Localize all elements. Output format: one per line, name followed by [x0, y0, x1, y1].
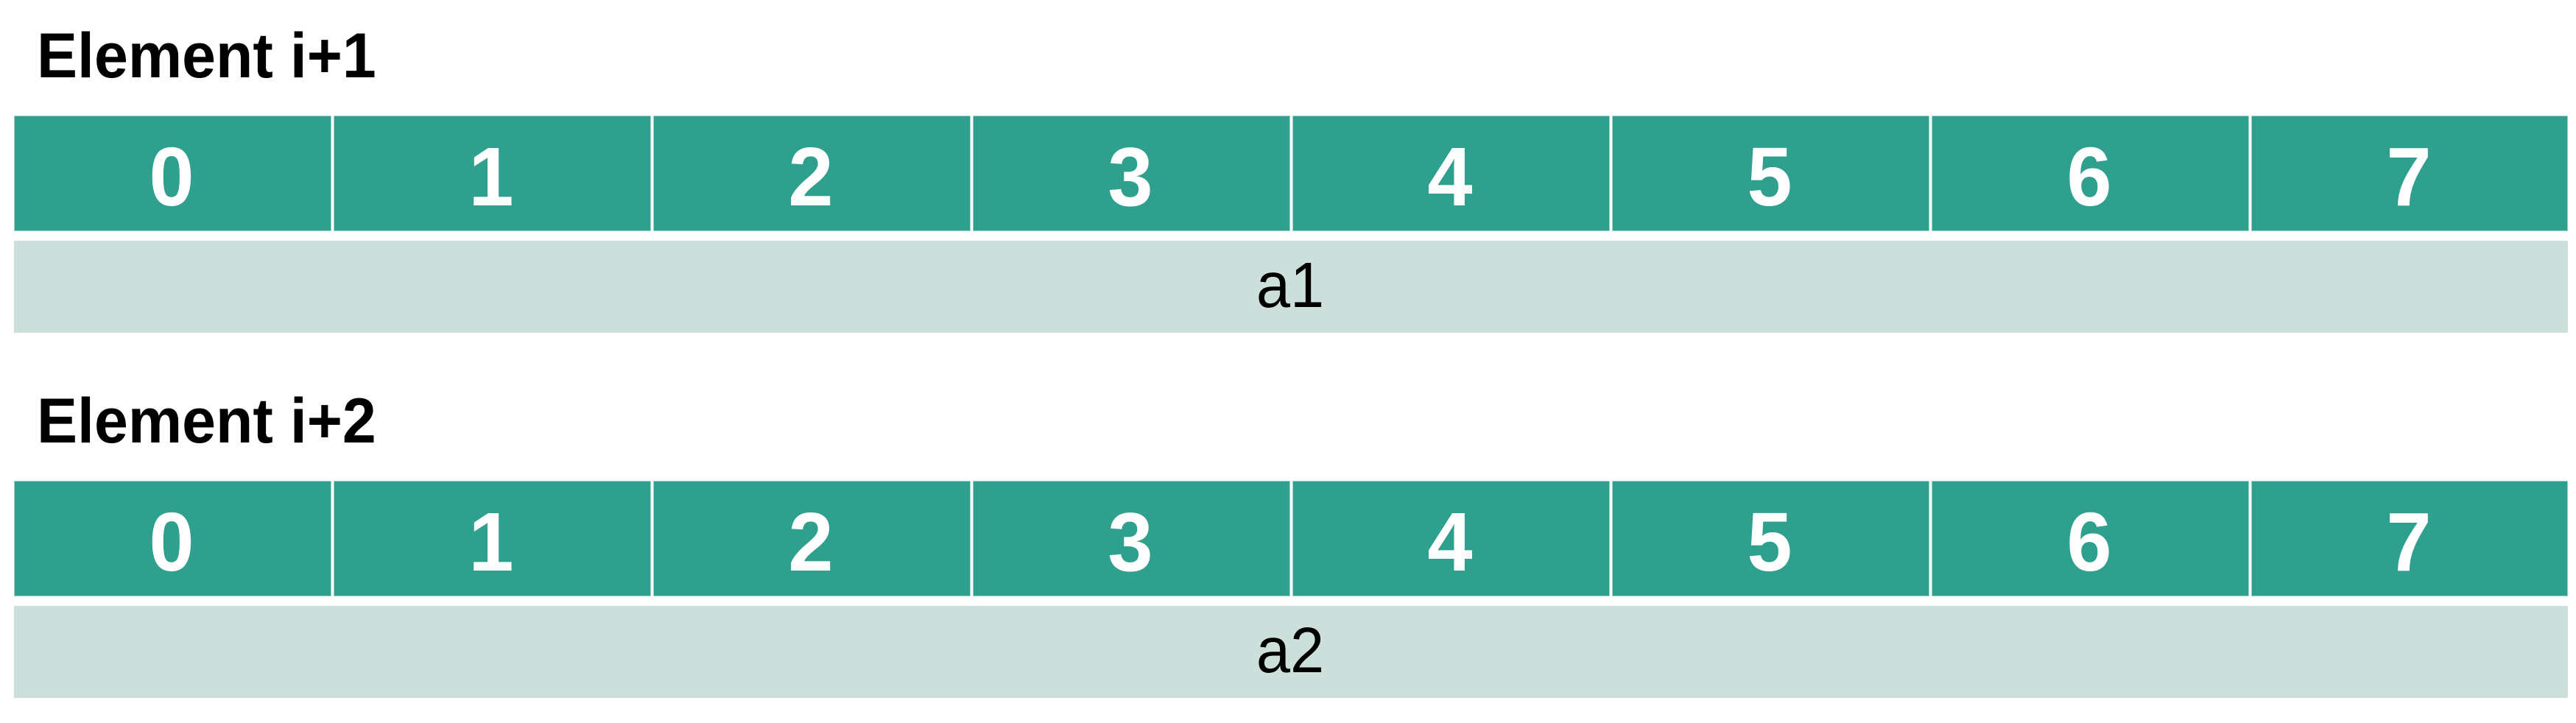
cell 2: 2 [788, 495, 834, 588]
cell 5: 5 [1747, 495, 1792, 588]
cell 4: 4 [1427, 495, 1473, 588]
cell 4 [1293, 482, 1610, 596]
cell 5 [1613, 116, 1929, 231]
value bar: a1: a1 [1256, 250, 1324, 321]
cell 6: 6 [2066, 495, 2112, 588]
cell 3 [974, 116, 1290, 231]
cell 3 [974, 482, 1290, 596]
cell 4 [1293, 116, 1610, 231]
value bar: a1 [14, 241, 2568, 333]
cell 6: 6 [2066, 130, 2112, 223]
cell 4: 4 [1427, 130, 1473, 223]
cell 2: 2 [788, 130, 834, 223]
cell 1 [334, 116, 651, 231]
heading: element i+1: Element i+1 [37, 19, 376, 91]
cell 6 [1932, 116, 2249, 231]
cell 0 [15, 482, 331, 596]
cell 0: 0 [149, 130, 194, 223]
cell 3: 3 [1108, 495, 1153, 588]
cell 1: 1 [468, 130, 514, 223]
index row: bytes 0 to 7 [15, 482, 2567, 596]
panel: element i+2 [14, 384, 2568, 698]
cell 5: 5 [1747, 130, 1792, 223]
cell 7 [2252, 482, 2567, 596]
cell 5 [1613, 482, 1929, 596]
panel: element i+1 [14, 19, 2568, 333]
cell 7 [2252, 116, 2567, 231]
cell 7: 7 [2386, 495, 2432, 588]
cell 2 [654, 116, 971, 231]
index row: bytes 0 to 7 [15, 116, 2567, 231]
cell 2 [654, 482, 971, 596]
cell 0: 0 [149, 495, 194, 588]
value bar: a2 [14, 606, 2568, 698]
cell 1 [334, 482, 651, 596]
heading: element i+2: Element i+2 [37, 384, 376, 456]
cell 1: 1 [468, 495, 514, 588]
value bar: a2: a2 [1256, 615, 1324, 686]
cell 3: 3 [1108, 130, 1153, 223]
cell 0 [15, 116, 331, 231]
cell 7: 7 [2386, 130, 2432, 223]
cell 6 [1932, 482, 2249, 596]
